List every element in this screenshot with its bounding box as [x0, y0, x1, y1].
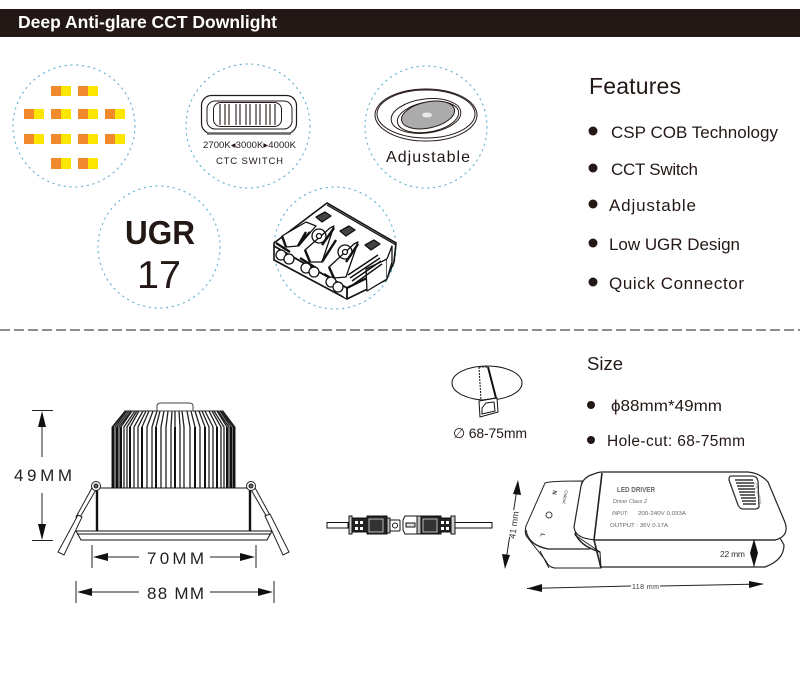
dimension: 41 mm: 41 mm: [507, 511, 521, 539]
heading: size: Size: [587, 353, 623, 374]
left plug: [327, 516, 400, 534]
body and flange: [76, 488, 272, 540]
diagram: cable connector: [327, 516, 492, 534]
driver labels: Driver Class 2: [613, 499, 647, 505]
icon: hole saw: [452, 366, 522, 417]
diagram: downlight side view: [58, 403, 289, 555]
connector lever 2: [300, 226, 336, 268]
feature list: [588, 123, 778, 293]
spring clips: [58, 482, 289, 555]
panel: CCT switch: [186, 64, 310, 188]
connector lever 3: [324, 242, 382, 284]
driver labels: LED DRIVER: [617, 485, 655, 494]
size list: ϕ88mm*49mm: [611, 398, 722, 415]
panel: quick connector: [274, 187, 396, 309]
connector windows: [316, 212, 380, 250]
dimension: 49MM: [14, 410, 72, 540]
icon: tilted downlight: [375, 89, 477, 141]
driver labels: Output: [562, 490, 569, 505]
feature list: Adjustable: [609, 196, 696, 215]
right plug: [403, 516, 492, 534]
driver labels: OUTPUT : 36V 0.17A: [610, 523, 668, 529]
dimension: 22 mm: [720, 539, 758, 567]
hole diameter label: ∅ 68-75mm: [453, 425, 527, 441]
icon: slide switch: [202, 96, 296, 134]
feature list: Low UGR Design: [609, 235, 740, 254]
feature list: Quick Connector: [609, 274, 744, 293]
switch caption: CTC SWITCH: [216, 156, 283, 167]
dimension: 70MM: [92, 545, 256, 568]
icon: quick connector block: [274, 203, 396, 299]
dimension: 118 mm: 118 mm: [632, 584, 659, 591]
dimension: 70MM: 70MM: [147, 549, 204, 568]
dimension: 118 mm: [527, 581, 764, 592]
connector wire holes: [276, 250, 343, 292]
adjustable caption: Adjustable: [386, 149, 470, 166]
panel: adjustable: [365, 66, 487, 188]
driver labels: L: [538, 533, 545, 538]
heading: features: Features: [589, 73, 681, 99]
driver labels: CTC SWITCH: [753, 482, 763, 505]
panel: UGR 17: [98, 186, 220, 308]
feature list: CCT Switch: [611, 160, 698, 179]
size list: [587, 398, 745, 450]
driver switch: [729, 476, 759, 509]
diagram: LED driver: [502, 472, 786, 592]
panel: CSP COB chip array: [13, 65, 135, 187]
connector lever 1: [276, 222, 316, 252]
driver labels: N: [550, 490, 557, 495]
dimension: 88MM: [76, 581, 274, 603]
feature list: CSP COB Technology: [611, 123, 778, 142]
driver labels: [538, 482, 763, 538]
driver housing: [525, 472, 786, 568]
dimension: 22 mm: 22 mm: [720, 549, 745, 559]
dimension: 41 mm: [502, 480, 521, 569]
heat sink: [112, 403, 235, 488]
dimension: 88MM: 88 MM: [147, 584, 204, 603]
title banner: [0, 9, 800, 37]
switch positions: 2700K◂3000K▸4000K: [203, 140, 297, 151]
UGR label: UGR: [125, 214, 195, 251]
driver labels: 200-240V 0.033A: [638, 511, 686, 517]
dimension: 49MM: 49MM: [14, 466, 72, 485]
UGR value: 17: [137, 254, 181, 297]
title banner: Deep Anti-glare CCT Downlight: [18, 12, 277, 32]
driver labels: INPUT:: [612, 511, 628, 517]
size list: Hole-cut: 68-75mm: [607, 433, 745, 450]
